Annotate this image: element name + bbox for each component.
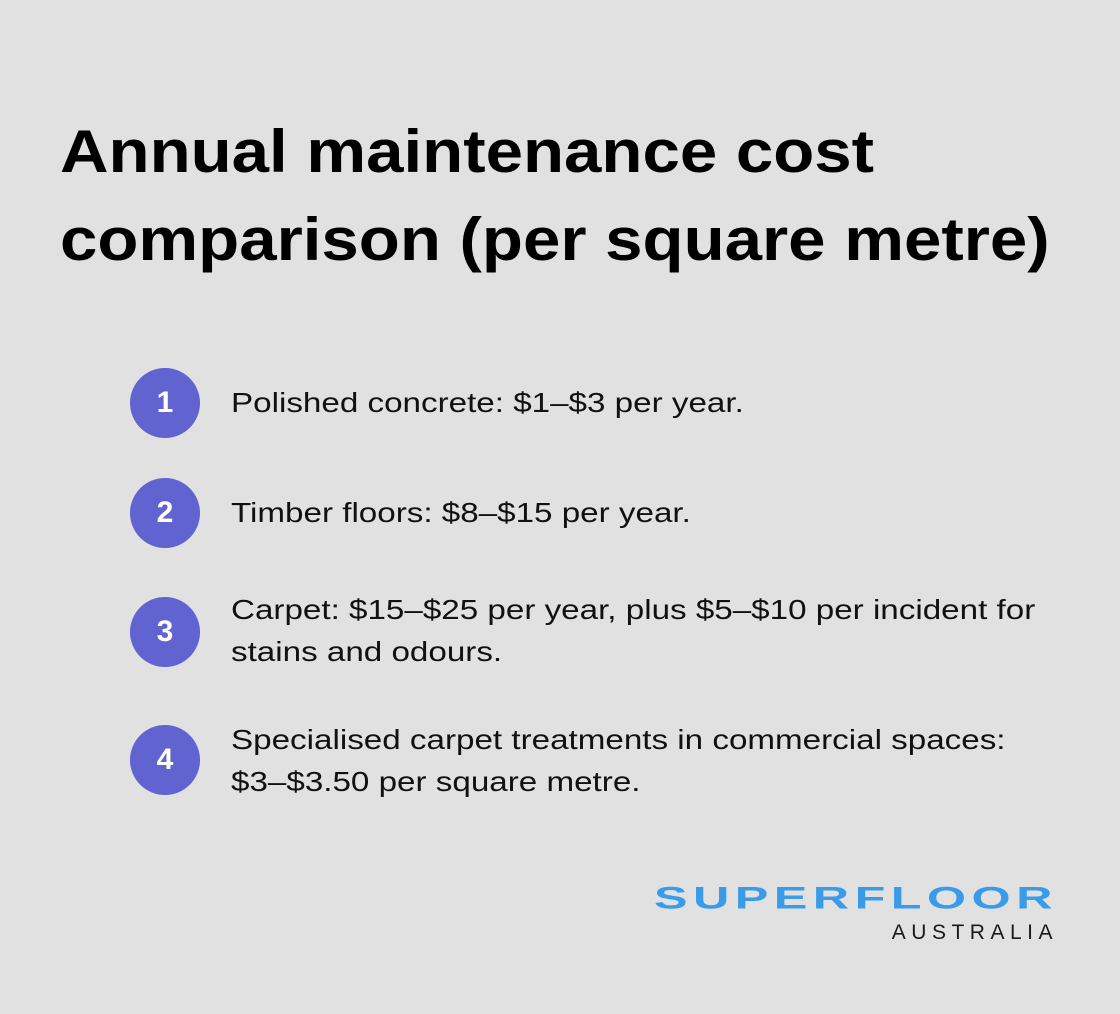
badge 1	[130, 368, 200, 438]
text 3: Carpet: $15–$25 per year, plus $5–$10 per incident for	[231, 594, 1035, 625]
title	[60, 118, 1050, 273]
item 2	[130, 478, 691, 548]
badge 3	[130, 597, 200, 667]
logo	[654, 880, 1058, 944]
badge 4	[130, 725, 200, 795]
item 1	[130, 368, 744, 438]
title: Annual maintenance cost	[60, 118, 874, 185]
badge 2: 2	[157, 496, 173, 529]
text 4	[231, 724, 1006, 797]
text 4: $3–$3.50 per square metre.	[231, 766, 640, 797]
item 4	[130, 724, 1006, 797]
logo wordmark: SUPERFLOOR	[654, 880, 1058, 915]
text 1: Polished concrete: $1–$3 per year.	[231, 387, 744, 418]
title: comparison (per square metre)	[60, 206, 1050, 273]
badge 3: 3	[157, 615, 173, 648]
badge 1: 1	[157, 386, 173, 419]
logo subtitle: AUSTRALIA	[892, 921, 1058, 944]
item 3	[130, 594, 1035, 667]
text 2: Timber floors: $8–$15 per year.	[231, 497, 691, 528]
text 3: stains and odours.	[231, 636, 502, 667]
badge 2	[130, 478, 200, 548]
text 3	[231, 594, 1035, 667]
text 4: Specialised carpet treatments in commercial spaces:	[231, 724, 1006, 755]
badge 4: 4	[157, 743, 173, 776]
